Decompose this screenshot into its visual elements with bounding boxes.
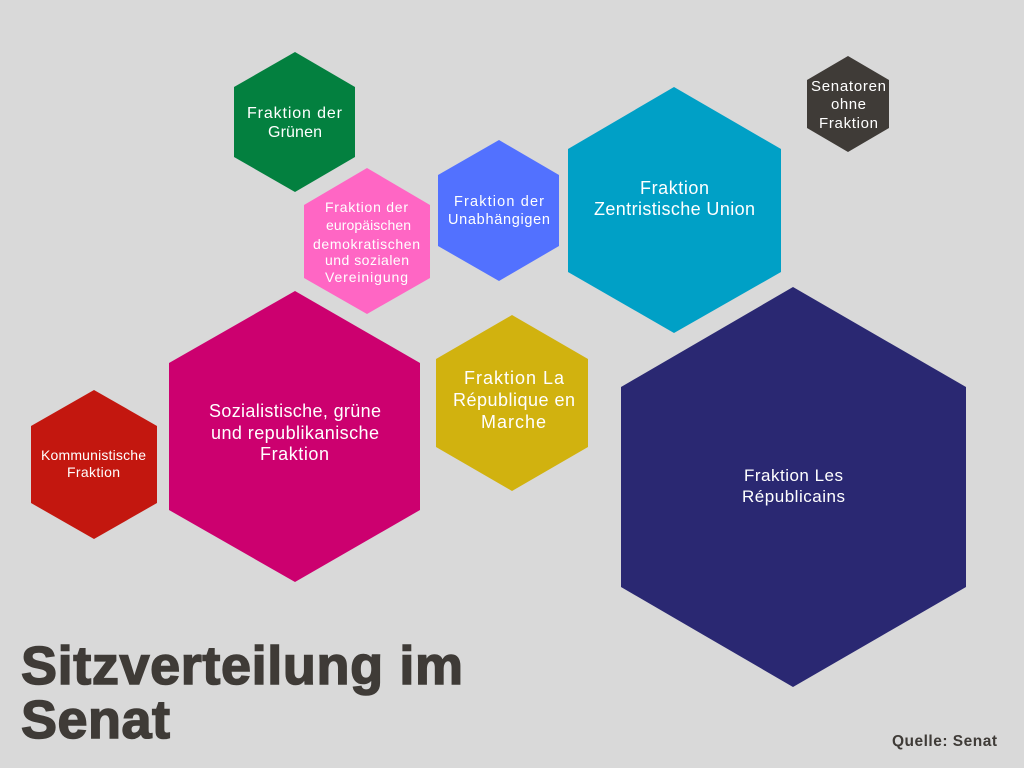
hexagon: Fraktion Les Républicains: Fraktion Les — [744, 466, 843, 485]
hexagon: Fraktion Les Républicains — [621, 287, 966, 687]
hexagon: Fraktion der europäischen demokratischen und sozialen Vereinigung: und sozialen — [325, 252, 409, 268]
hexagon: Fraktion La République en Marche — [436, 315, 588, 491]
hexagon: Sozialistische, grüne und republikanische Fraktion — [169, 291, 420, 582]
hexagon: Fraktion der Grünen: Fraktion der — [247, 105, 343, 122]
hexagon: Fraktion Les Républicains: Républicains — [742, 487, 845, 506]
hexagon: Fraktion der Grünen: Grünen — [268, 124, 322, 141]
title: Sitzverteilung im — [21, 636, 463, 696]
hexagon: Fraktion der europäischen demokratischen und sozialen Vereinigung: demokratischen — [313, 236, 420, 252]
hexagon: Sozialistische, grüne und republikanische Fraktion: und republikanische — [211, 423, 379, 443]
hexagon: Fraktion der europäischen demokratischen und sozialen Vereinigung: europäischen — [326, 217, 411, 233]
hexagon: Fraktion La République en Marche: Marche — [481, 412, 546, 432]
hexagon: Kommunistische Fraktion: Fraktion — [67, 464, 120, 480]
hexagon: Kommunistische Fraktion — [31, 390, 157, 539]
hexagon: Senatoren ohne Fraktion: Senatoren — [811, 78, 886, 95]
hexagon: Fraktion Zentristische Union: Zentristische Union — [594, 199, 755, 219]
hexagon: Sozialistische, grüne und republikanische Fraktion: Fraktion — [260, 444, 329, 464]
hexagon: Fraktion La République en Marche: République en — [453, 390, 575, 410]
hexagon: Fraktion La République en Marche: Fraktion La — [464, 368, 565, 388]
hexagon: Fraktion der Unabhängigen: Fraktion der — [454, 194, 544, 210]
hexagon: Kommunistische Fraktion: Kommunistische — [41, 447, 146, 463]
hexagon: Fraktion der Unabhängigen: Unabhängigen — [448, 212, 550, 228]
hexagon: Fraktion Zentristische Union — [568, 87, 781, 333]
hexagon: Fraktion der europäischen demokratischen und sozialen Vereinigung: Fraktion der — [325, 199, 408, 215]
hexagon: Fraktion der Unabhängigen — [438, 140, 559, 281]
hexagon: Fraktion Zentristische Union: Fraktion — [640, 178, 709, 198]
title: Senat — [21, 690, 170, 750]
source note: Quelle: Senat — [892, 733, 997, 750]
hexagon: Fraktion der europäischen demokratischen und sozialen Vereinigung: Vereinigung — [325, 269, 408, 285]
title — [21, 636, 463, 750]
hexagon: Sozialistische, grüne und republikanische Fraktion: Sozialistische, grüne — [209, 401, 381, 421]
hexagon: Senatoren ohne Fraktion — [807, 56, 889, 152]
hexagon: Fraktion der Grünen — [234, 52, 355, 192]
hexagon: Fraktion der europäischen demokratischen und sozialen Vereinigung — [304, 168, 430, 314]
hexagon: Senatoren ohne Fraktion: Fraktion — [819, 115, 878, 132]
hexagon: Senatoren ohne Fraktion: ohne — [831, 96, 866, 113]
